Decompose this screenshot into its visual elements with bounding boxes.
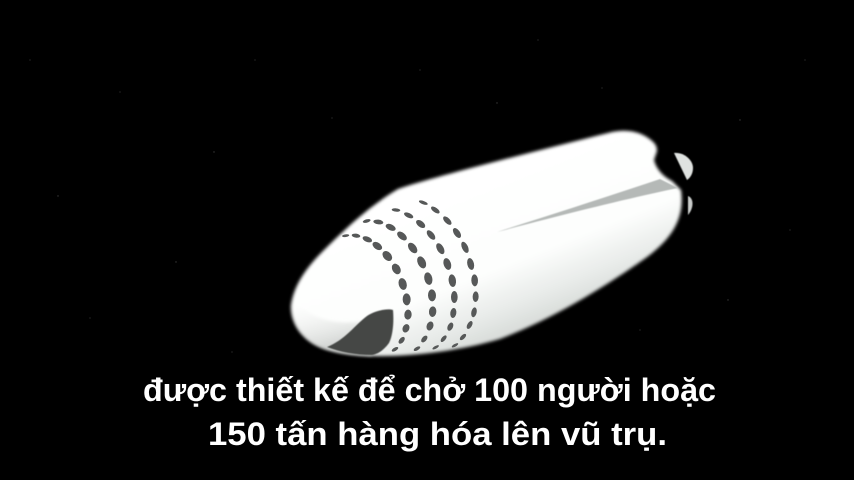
nose shading — [291, 298, 372, 356]
spacecraft hull — [291, 131, 682, 356]
porthole row 2 — [362, 218, 437, 352]
caption line 2: 150 tấn hàng hóa lên vũ trụ. — [208, 416, 667, 452]
caption line 1: được thiết kế để chở 100 người hoặc — [143, 372, 716, 408]
spacecraft — [291, 131, 693, 356]
porthole row 3 — [392, 208, 458, 350]
fin shadow stripe — [497, 179, 678, 232]
porthole row 1 — [342, 233, 412, 353]
porthole row 4 — [418, 200, 479, 348]
icon: engine bumps — [674, 153, 693, 215]
background stars — [29, 39, 806, 353]
caption — [143, 372, 716, 452]
porthole rows — [342, 200, 479, 353]
nose heat shield window — [327, 309, 393, 355]
